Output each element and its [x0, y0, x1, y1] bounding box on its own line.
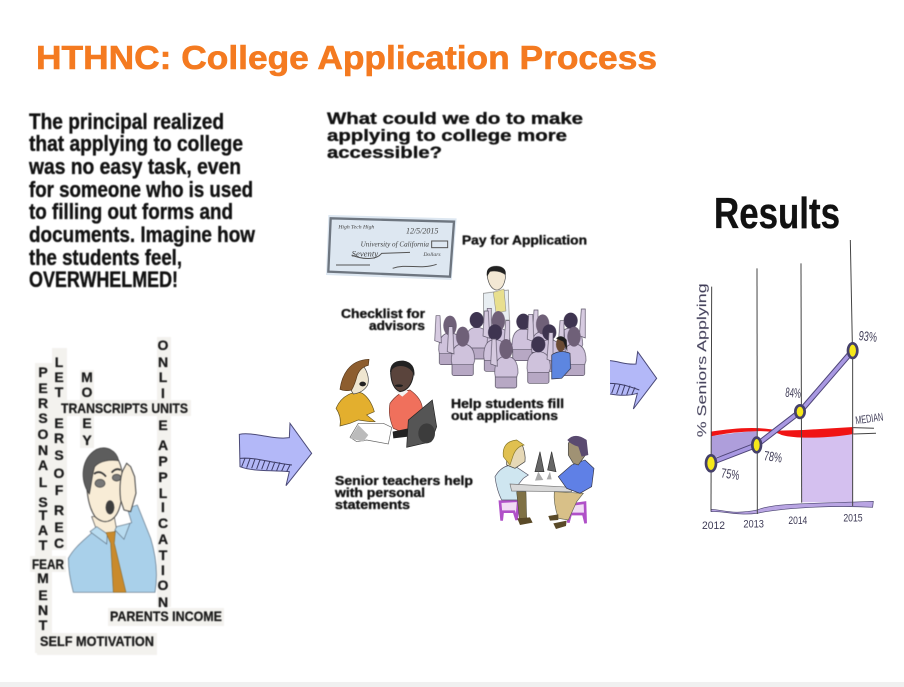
- panel: overwhelmed word collage: T: [55, 384, 64, 400]
- words: vertical and horizontal: P: [38, 364, 48, 380]
- panel: overwhelmed word collage: I: [161, 562, 165, 578]
- panel: overwhelmed word collage: Y: [82, 432, 92, 448]
- panel: overwhelmed word collage: L: [159, 485, 168, 501]
- panel: overwhelmed word collage: E: [82, 415, 92, 431]
- panel: overwhelmed word collage: L: [159, 369, 168, 385]
- panel: overwhelmed word collage: C: [54, 535, 64, 551]
- shaded 2012-2013 gap: [711, 431, 757, 458]
- panel: overwhelmed word collage: TRANSCRIPTS UNITS: [61, 400, 188, 416]
- label: checklist for advisors: Checklist for: [341, 307, 425, 321]
- words: vertical and horizontal: T: [39, 617, 48, 633]
- panel: overwhelmed word collage: O: [158, 337, 169, 353]
- panel: overwhelmed word collage: [30, 337, 224, 655]
- panel: overwhelmed word collage: M: [81, 369, 93, 385]
- panel: overwhelmed word collage: A: [158, 437, 168, 453]
- icon: teacher and students raising hands: [435, 266, 586, 388]
- text block: principal story: to filling out forms and: [29, 199, 233, 224]
- arrow: solutions to results: [610, 352, 657, 409]
- chart: percent of seniors applying: MEDIAN: [855, 412, 884, 427]
- text block: principal story: the students feel,: [29, 245, 182, 270]
- title: HTHNC: College Application Process: [36, 39, 657, 76]
- words: vertical and horizontal: A: [38, 522, 48, 538]
- panel: overwhelmed word collage: O: [82, 384, 93, 400]
- panel: overwhelmed word collage: E: [54, 519, 64, 535]
- panel: overwhelmed word collage: S: [54, 447, 64, 463]
- panel: overwhelmed word collage: O: [54, 465, 65, 481]
- icon: check: [326, 215, 457, 280]
- words: vertical and horizontal: S: [38, 494, 48, 510]
- trend line: [711, 351, 853, 463]
- label: pay for application: Pay for Application: [462, 234, 587, 248]
- icon: check: University of California: [361, 240, 429, 249]
- icon: check: High Tech High: [337, 224, 374, 230]
- panel: overwhelmed word collage: O: [158, 577, 169, 593]
- icon: check: 12/5/2015: [406, 226, 438, 235]
- panel: overwhelmed word collage: N: [158, 354, 168, 370]
- panel: overwhelmed word collage: R: [54, 502, 64, 518]
- students: [435, 316, 462, 365]
- icon: shocked man: [68, 448, 156, 592]
- words: vertical and horizontal: E: [38, 587, 48, 603]
- bottom strip: [0, 682, 904, 687]
- words: vertical and horizontal: E: [38, 380, 48, 396]
- panel: overwhelmed word collage: I: [161, 385, 165, 401]
- panel: overwhelmed word collage: FEAR: [32, 556, 64, 572]
- label: help students fill out applications: [451, 397, 564, 423]
- panel: overwhelmed word collage: E: [158, 417, 168, 433]
- words: vertical and horizontal: A: [38, 457, 48, 473]
- heading: middle question: accessible?: [327, 143, 442, 162]
- icon: check: Seventy: [352, 249, 378, 259]
- heading: middle question: [327, 109, 583, 162]
- icon: advisor and student at computer: [336, 359, 437, 447]
- label: senior teachers help: with personal: [334, 486, 425, 500]
- student in blue: [552, 336, 571, 379]
- label: help students fill out applications: Help students fill: [451, 397, 564, 411]
- panel: overwhelmed word collage: R: [54, 430, 64, 446]
- panel: overwhelmed word collage: F: [55, 482, 64, 498]
- word backgrounds: [30, 337, 224, 655]
- panel: overwhelmed word collage: P: [158, 453, 168, 469]
- words: vertical and horizontal: T: [39, 507, 48, 523]
- panel: overwhelmed word collage: N: [158, 594, 168, 610]
- words: vertical and horizontal: O: [38, 426, 49, 442]
- words: vertical and horizontal: R: [38, 395, 48, 411]
- data points: [706, 343, 857, 471]
- panel: overwhelmed word collage: A: [158, 531, 168, 547]
- teacher: [483, 266, 509, 320]
- icon: check: Dollars: [422, 252, 441, 258]
- panel: overwhelmed word collage: E: [54, 415, 64, 431]
- words: vertical and horizontal: N: [38, 602, 48, 618]
- text block: principal story: for someone who is used: [29, 177, 253, 202]
- lavender 2014-2015 area: [802, 434, 853, 502]
- chart: percent of seniors applying: 2014: [788, 515, 807, 527]
- heading: results: Results: [714, 189, 840, 238]
- label: checklist for advisors: advisors: [369, 319, 425, 333]
- text block: principal story: that applying to college: [29, 131, 243, 156]
- panel: overwhelmed word collage: I: [161, 499, 165, 515]
- panel: overwhelmed word collage: L: [55, 354, 64, 370]
- text block: principal story: documents. Imagine how: [29, 222, 256, 247]
- panel: overwhelmed word collage: T: [159, 547, 168, 563]
- grid lines: [711, 240, 876, 514]
- chart: percent of seniors applying: 2012: [702, 520, 725, 532]
- label: help students fill out applications: out applications: [451, 409, 558, 423]
- panel: overwhelmed word collage: SELF MOTIVATION: [40, 633, 154, 649]
- words: vertical and horizontal: T: [39, 537, 48, 553]
- chart: percent of seniors applying: 93%: [858, 328, 878, 345]
- words: vertical and horizontal: M: [37, 570, 49, 586]
- chart: percent of seniors applying: 84%: [785, 385, 802, 401]
- chart: percent of seniors applying: 2013: [743, 518, 764, 530]
- text block: principal story: was no easy task, even: [28, 154, 241, 179]
- arrow: collage to solutions: [239, 423, 312, 486]
- label: senior teachers help: [334, 474, 473, 512]
- panel: overwhelmed word collage: C: [158, 515, 168, 531]
- heading: middle question: applying to college more: [327, 126, 567, 145]
- icon: teacher and student at table: [495, 436, 594, 529]
- text block: principal story: The principal realized: [29, 109, 224, 134]
- chart: percent of seniors applying: [695, 240, 884, 532]
- chart: percent of seniors applying: % Seniors Applying: [695, 283, 709, 437]
- chart: percent of seniors applying: 2015: [843, 512, 863, 524]
- label: senior teachers help: statements: [335, 498, 410, 512]
- heading: middle question: What could we do to make: [327, 109, 583, 128]
- text block: principal story: OVERWHELMED!: [29, 267, 178, 292]
- label: checklist for advisors: [341, 307, 425, 333]
- panel: overwhelmed word collage: E: [54, 369, 64, 385]
- text block: principal story: [28, 109, 256, 292]
- panel: overwhelmed word collage: PARENTS INCOME: [110, 608, 222, 624]
- bottom band: [711, 501, 873, 514]
- data labels: 75%: [720, 465, 741, 483]
- words: vertical and horizontal: S: [38, 410, 48, 426]
- words: vertical and horizontal: L: [39, 474, 48, 490]
- panel: overwhelmed word collage: P: [158, 469, 168, 485]
- label: senior teachers help: Senior teachers help: [335, 474, 473, 488]
- words: vertical and horizontal: N: [38, 442, 48, 458]
- chart: percent of seniors applying: 78%: [763, 448, 783, 466]
- median band: [711, 427, 853, 438]
